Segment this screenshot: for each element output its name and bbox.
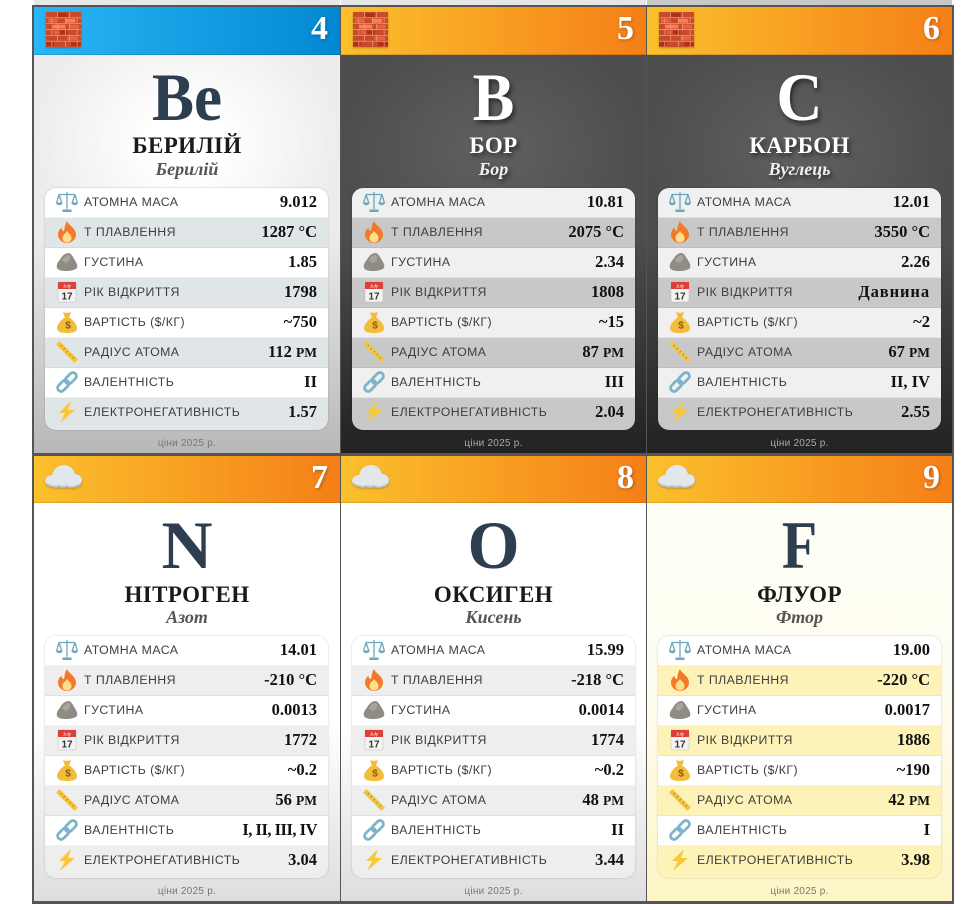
row: atomic radius (352, 338, 635, 368)
row: atomic radius: 67 PM (888, 342, 930, 361)
row: atomic mass: АТОМНА МАСА (697, 195, 791, 209)
row: electronegativity (352, 398, 635, 430)
atomic number: 8 (617, 459, 634, 496)
row: discovery year: РІК ВІДКРИТТЯ (697, 733, 793, 747)
atomic number: 7 (311, 459, 328, 496)
atomic number: 4 (311, 10, 328, 47)
alternate name: Берилій (156, 159, 218, 179)
row: atomic radius (658, 338, 941, 368)
row: electronegativity: 2.04 (595, 402, 624, 421)
row: atomic mass (658, 188, 941, 218)
atomic number: 9 (923, 459, 940, 496)
row: atomic mass: 14.01 (280, 640, 317, 659)
row: valence: II (304, 372, 317, 391)
row: price: ~15 (599, 312, 624, 331)
row: price (658, 308, 941, 338)
row: melting point: Т ПЛАВЛЕННЯ (84, 225, 176, 239)
row: valence (352, 368, 635, 398)
row: valence: II, IV (891, 372, 930, 391)
row: price: ВАРТІСТЬ ($/КГ) (391, 315, 492, 329)
element name: КАРБОН (749, 133, 850, 158)
header: nitrogen (34, 456, 340, 503)
atomic number: 5 (617, 10, 634, 47)
row: atomic mass: АТОМНА МАСА (697, 643, 791, 657)
row: atomic mass: 9.012 (280, 192, 317, 211)
alternate name: Фтор (776, 607, 823, 627)
row: melting point (658, 218, 941, 248)
row: density: ГУСТИНА (391, 255, 451, 269)
row: valence: ВАЛЕНТНІСТЬ (697, 823, 787, 837)
row: density (352, 696, 635, 726)
row: electronegativity: ЕЛЕКТРОНЕГАТИВНІСТЬ (697, 405, 853, 419)
row: density: ГУСТИНА (697, 255, 757, 269)
row: electronegativity: 3.44 (595, 850, 624, 869)
row: discovery year (658, 726, 941, 756)
row: atomic radius: 112 PM (268, 342, 317, 361)
data table (352, 636, 635, 878)
row: valence: ВАЛЕНТНІСТЬ (391, 823, 481, 837)
row: atomic mass: 19.00 (893, 640, 930, 659)
row: electronegativity: 3.04 (288, 850, 317, 869)
row: density: ГУСТИНА (84, 255, 144, 269)
footnote: ціни 2025 р. (464, 886, 523, 897)
row: atomic mass: 12.01 (893, 192, 930, 211)
panel: boron card (341, 7, 646, 453)
row: atomic radius: РАДІУС АТОМА (391, 793, 486, 807)
row: atomic radius: РАДІУС АТОМА (84, 345, 179, 359)
row: melting point (45, 666, 328, 696)
icon: brick (352, 12, 389, 49)
alternate name: Вуглець (769, 159, 830, 179)
data table (352, 188, 635, 430)
symbol: N (161, 507, 213, 583)
footnote: ціни 2025 р. (158, 886, 216, 897)
row: valence: ВАЛЕНТНІСТЬ (84, 375, 174, 389)
row: price: ~0.2 (595, 760, 624, 779)
row: valence (658, 368, 941, 398)
row: melting point: Т ПЛАВЛЕННЯ (697, 225, 789, 239)
symbol: B (473, 59, 514, 135)
row: atomic mass: АТОМНА МАСА (84, 195, 178, 209)
row: valence: ВАЛЕНТНІСТЬ (84, 823, 174, 837)
row: price (352, 756, 635, 786)
card background (34, 503, 340, 901)
header: oxygen (341, 456, 646, 503)
row: melting point: Т ПЛАВЛЕННЯ (391, 225, 483, 239)
row: atomic mass (45, 636, 328, 666)
row: price: ВАРТІСТЬ ($/КГ) (84, 763, 185, 777)
element name: БОР (469, 133, 518, 158)
icon: cloud (44, 465, 83, 490)
row: discovery year: 1798 (284, 282, 317, 301)
row: valence: II (611, 820, 624, 839)
alternate name: Бор (479, 159, 508, 179)
row: price: ~0.2 (288, 760, 317, 779)
row: price: ВАРТІСТЬ ($/КГ) (697, 763, 798, 777)
row: electronegativity: ЕЛЕКТРОНЕГАТИВНІСТЬ (391, 853, 547, 867)
row: price: ~750 (284, 312, 317, 331)
row: melting point: 3550 °C (874, 222, 930, 241)
row: melting point: -220 °C (877, 670, 930, 689)
row: price: ~190 (897, 760, 930, 779)
row: density: ГУСТИНА (697, 703, 757, 717)
alternate name: Кисень (465, 607, 522, 627)
row: valence (45, 816, 328, 846)
row: atomic radius: 42 PM (888, 790, 930, 809)
atomic number: 6 (923, 10, 940, 47)
row: valence (45, 368, 328, 398)
row: electronegativity: ЕЛЕКТРОНЕГАТИВНІСТЬ (697, 853, 853, 867)
card background (34, 55, 340, 453)
row: discovery year: РІК ВІДКРИТТЯ (84, 285, 180, 299)
row: melting point: 1287 °C (261, 222, 317, 241)
element name: БЕРИЛІЙ (132, 133, 242, 158)
symbol: O (468, 507, 519, 583)
data table (45, 636, 328, 878)
row: electronegativity: 1.57 (288, 402, 317, 421)
element name: ФЛУОР (757, 582, 842, 607)
row: discovery year: 1808 (591, 282, 624, 301)
row: discovery year: 1886 (897, 730, 930, 749)
row: melting point: 2075 °C (568, 222, 624, 241)
row: price (45, 308, 328, 338)
row: electronegativity: 2.55 (901, 402, 930, 421)
row: density: 2.34 (595, 252, 624, 271)
row: discovery year: РІК ВІДКРИТТЯ (391, 733, 487, 747)
symbol: F (782, 507, 817, 583)
row: price: ~2 (913, 312, 930, 331)
row: atomic mass (352, 188, 635, 218)
row: discovery year (352, 278, 635, 308)
row: atomic mass: 15.99 (587, 640, 624, 659)
alternate name: Азот (166, 607, 208, 627)
panel: fluorine card (647, 456, 952, 901)
row: discovery year: РІК ВІДКРИТТЯ (84, 733, 180, 747)
row: atomic mass: АТОМНА МАСА (391, 643, 485, 657)
row: atomic radius: РАДІУС АТОМА (697, 345, 792, 359)
row: electronegativity: 3.98 (901, 850, 930, 869)
footnote: ціни 2025 р. (158, 438, 216, 449)
row: density (352, 248, 635, 278)
row: density (45, 248, 328, 278)
row: discovery year: Давнина (858, 282, 930, 301)
top strip: previous card, column 3 (647, 0, 952, 5)
row: melting point (658, 666, 941, 696)
panel: carbon card (647, 7, 952, 453)
row: price: ВАРТІСТЬ ($/КГ) (391, 763, 492, 777)
row: density: 1.85 (288, 252, 317, 271)
row: discovery year (658, 278, 941, 308)
row: electronegativity (45, 398, 328, 430)
row: melting point: -210 °C (264, 670, 317, 689)
row: atomic radius: РАДІУС АТОМА (697, 793, 792, 807)
data table (658, 636, 941, 878)
row: melting point (352, 218, 635, 248)
row: electronegativity (658, 398, 941, 430)
row: valence: ВАЛЕНТНІСТЬ (697, 375, 787, 389)
row: valence: ВАЛЕНТНІСТЬ (391, 375, 481, 389)
row: electronegativity (352, 846, 635, 878)
row: price (658, 756, 941, 786)
row: melting point: Т ПЛАВЛЕННЯ (84, 673, 176, 687)
icon: cloud (351, 465, 390, 490)
card background (647, 55, 952, 453)
row: atomic mass (45, 188, 328, 218)
row: electronegativity: ЕЛЕКТРОНЕГАТИВНІСТЬ (391, 405, 547, 419)
panel: oxygen card (341, 456, 646, 901)
header: boron (341, 7, 646, 55)
row: price: ВАРТІСТЬ ($/КГ) (84, 315, 185, 329)
row: density (658, 248, 941, 278)
header: carbon (647, 7, 952, 55)
row: density: 0.0014 (579, 700, 624, 719)
row: discovery year (45, 726, 328, 756)
card background (341, 55, 646, 453)
element name: ОКСИГЕН (434, 582, 553, 607)
row: valence (352, 816, 635, 846)
row: atomic mass: АТОМНА МАСА (391, 195, 485, 209)
row: atomic radius: РАДІУС АТОМА (84, 793, 179, 807)
row: density: 0.0017 (885, 700, 930, 719)
icon: cloud (657, 465, 696, 490)
row: atomic mass: 10.81 (587, 192, 624, 211)
top strip: previous card, column 1 (34, 0, 340, 5)
row: valence: III (605, 372, 624, 391)
row: atomic radius (45, 338, 328, 368)
row: discovery year: РІК ВІДКРИТТЯ (697, 285, 793, 299)
row: atomic radius (352, 786, 635, 816)
data table (45, 188, 328, 430)
row: discovery year (352, 726, 635, 756)
row: discovery year: РІК ВІДКРИТТЯ (391, 285, 487, 299)
row: atomic radius: РАДІУС АТОМА (391, 345, 486, 359)
panel: nitrogen card (34, 456, 340, 901)
element name: НІТРОГЕН (124, 582, 250, 607)
row: valence: I, II, III, IV (242, 820, 317, 839)
icon: brick (45, 12, 82, 49)
row: electronegativity (45, 846, 328, 878)
row: density: 2.26 (901, 252, 930, 271)
header: beryllium (34, 7, 340, 55)
footnote: ціни 2025 р. (770, 886, 829, 897)
row: valence (658, 816, 941, 846)
row: density: 0.0013 (272, 700, 317, 719)
row: electronegativity: ЕЛЕКТРОНЕГАТИВНІСТЬ (84, 853, 240, 867)
panel: beryllium card (34, 7, 340, 453)
symbol: Be (152, 59, 222, 135)
row: density (45, 696, 328, 726)
row: melting point: Т ПЛАВЛЕННЯ (391, 673, 483, 687)
icon: brick (658, 12, 695, 49)
row: atomic mass (658, 636, 941, 666)
row: atomic radius: 87 PM (582, 342, 624, 361)
row: melting point: Т ПЛАВЛЕННЯ (697, 673, 789, 687)
footnote: ціни 2025 р. (770, 438, 829, 449)
row: price (45, 756, 328, 786)
row: discovery year: 1772 (284, 730, 317, 749)
card background (647, 503, 952, 901)
row: atomic mass: АТОМНА МАСА (84, 643, 178, 657)
row: atomic radius (658, 786, 941, 816)
top strip: previous card, column 2 (341, 0, 646, 5)
row: atomic radius: 48 PM (582, 790, 624, 809)
row: atomic radius (45, 786, 328, 816)
card background (341, 503, 646, 901)
header: fluorine (647, 456, 952, 503)
row: melting point (352, 666, 635, 696)
symbol: C (776, 59, 823, 135)
row: density: ГУСТИНА (84, 703, 144, 717)
row: valence: I (924, 820, 930, 839)
row: discovery year (45, 278, 328, 308)
row: melting point: -218 °C (571, 670, 624, 689)
row: atomic radius: 56 PM (275, 790, 317, 809)
row: density (658, 696, 941, 726)
footnote: ціни 2025 р. (464, 438, 523, 449)
row: price: ВАРТІСТЬ ($/КГ) (697, 315, 798, 329)
row: atomic mass (352, 636, 635, 666)
row: electronegativity: ЕЛЕКТРОНЕГАТИВНІСТЬ (84, 405, 240, 419)
row: price (352, 308, 635, 338)
row: density: ГУСТИНА (391, 703, 451, 717)
row: electronegativity (658, 846, 941, 878)
row: melting point (45, 218, 328, 248)
row: discovery year: 1774 (591, 730, 624, 749)
data table (658, 188, 941, 430)
